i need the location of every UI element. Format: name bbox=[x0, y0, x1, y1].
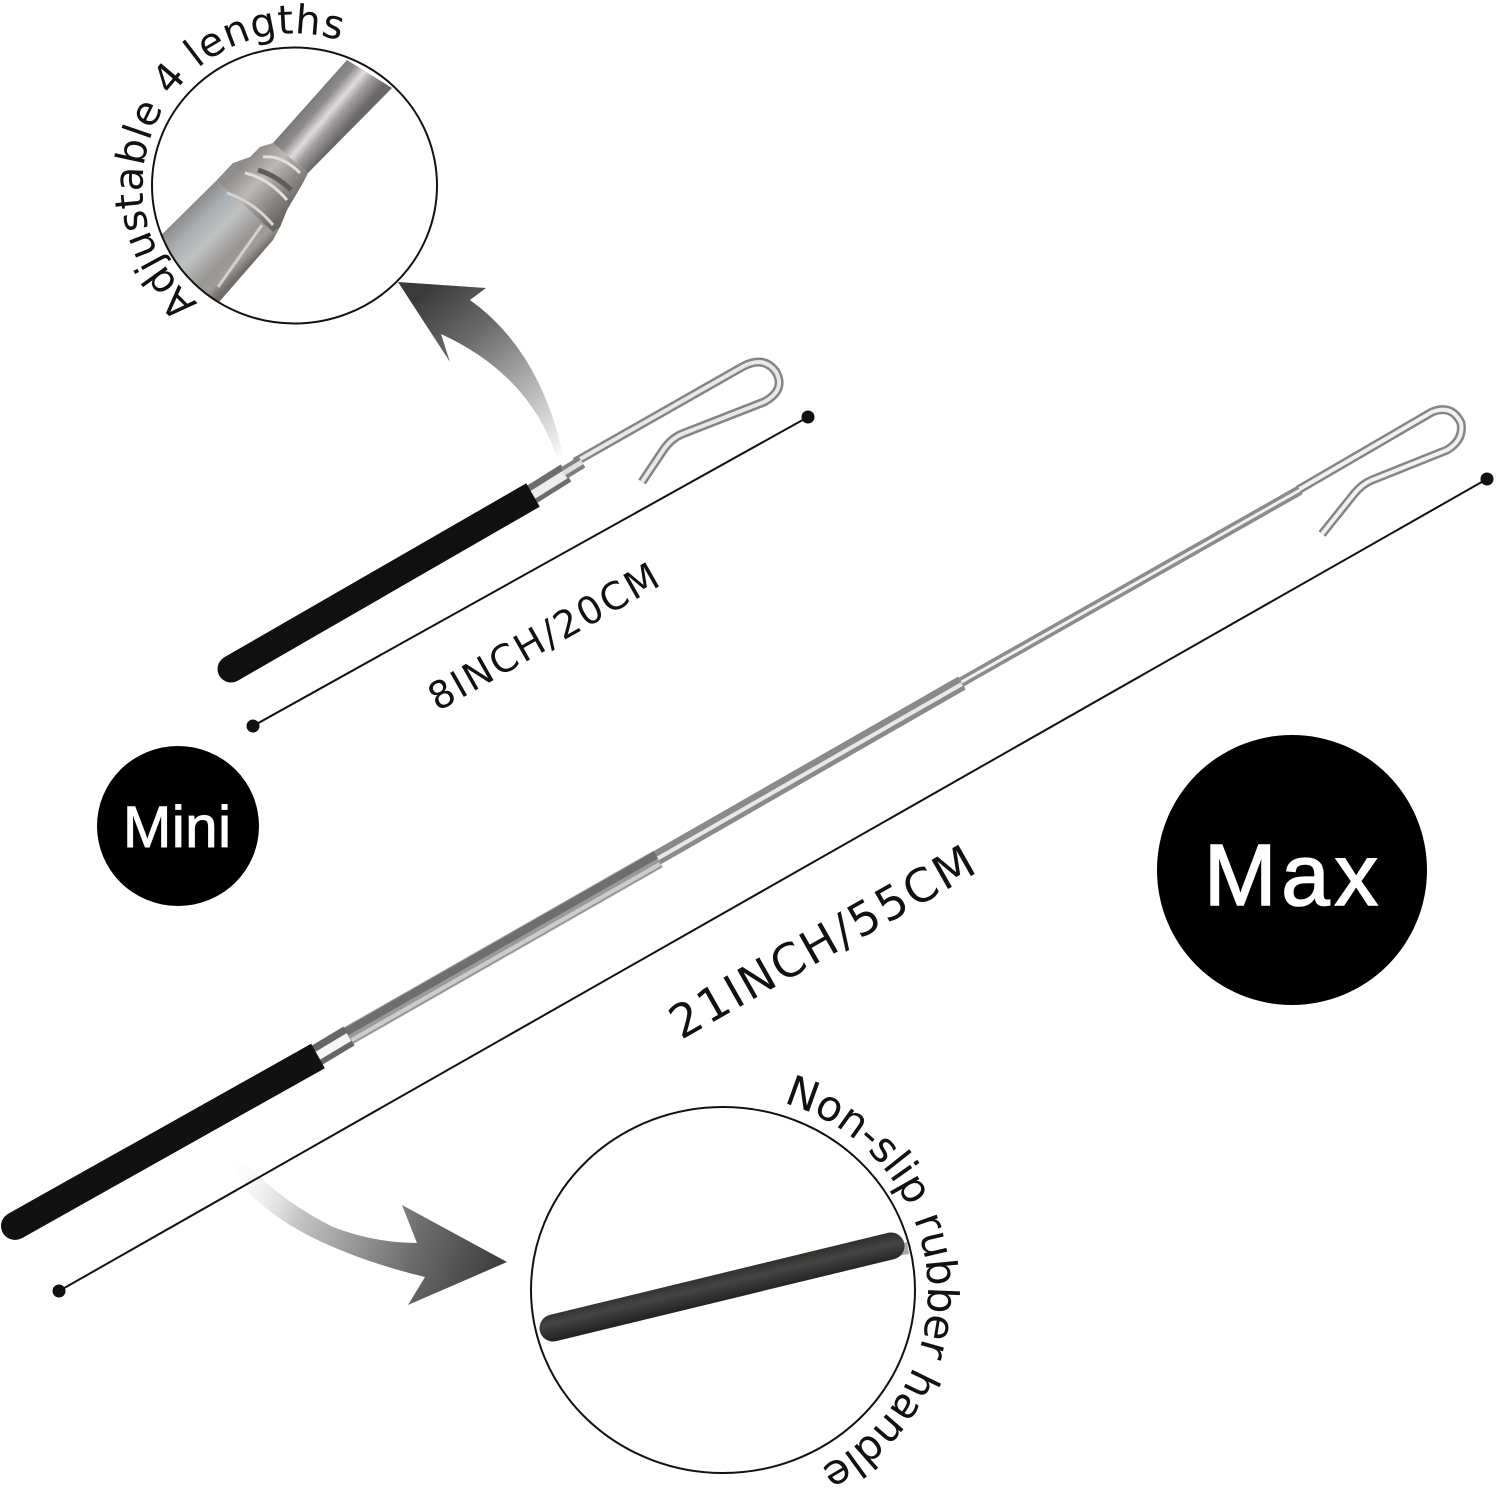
max rod bbox=[1, 410, 1461, 1240]
badge: Max: Max bbox=[1204, 827, 1378, 924]
badge: Mini bbox=[97, 746, 259, 906]
arrow: from mini rod to joint detail bbox=[398, 282, 563, 458]
detail callout: adjustable lengths bbox=[114, 3, 438, 324]
curved label: Non-slip rubber handle: Non-slip rubber handle bbox=[787, 1075, 960, 1484]
curved label: Adjustable 4 lengths: Adjustable 4 lengths bbox=[114, 3, 342, 316]
arrow: from max handle to rubber detail bbox=[227, 1150, 507, 1305]
badge: Mini: Mini bbox=[123, 795, 231, 860]
circle outline: bottom detail bbox=[531, 1107, 915, 1473]
mini hook wire bbox=[575, 362, 779, 482]
detail photo: telescoping joint bbox=[162, 60, 392, 302]
mini black handle bbox=[218, 495, 533, 682]
detail callout: rubber handle bbox=[530, 1075, 960, 1484]
dimension line: max bbox=[52, 472, 1494, 1298]
max hook wire bbox=[1298, 410, 1461, 534]
badge: Max bbox=[1157, 735, 1427, 1005]
circle outline: top detail bbox=[152, 48, 437, 324]
max telescopic sections bbox=[314, 490, 1300, 1058]
dimension line: mini bbox=[246, 410, 814, 732]
dimension label: mini length: 8INCH/20CM bbox=[420, 554, 667, 720]
max black handle bbox=[1, 1056, 318, 1240]
mini rod bbox=[218, 362, 779, 682]
dimension label: max length: 21INCH/55CM bbox=[660, 834, 984, 1050]
detail photo: rubber handle bbox=[553, 1246, 908, 1328]
mini chrome section bbox=[531, 462, 582, 496]
